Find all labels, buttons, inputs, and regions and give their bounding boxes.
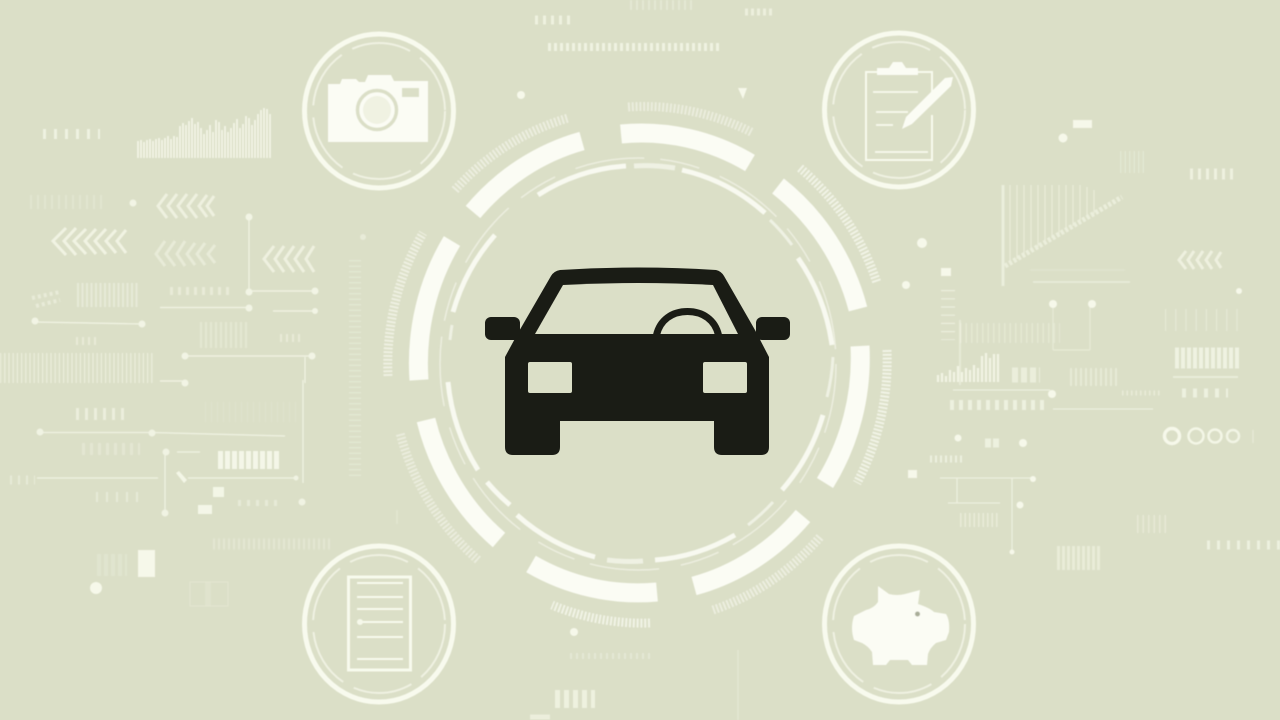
icon: document in circle xyxy=(304,546,454,702)
faint scatter circle xyxy=(1120,151,1147,173)
right headlight xyxy=(703,362,747,393)
right mirror xyxy=(756,317,790,340)
left headlight xyxy=(528,362,572,393)
document xyxy=(348,577,410,670)
camera body xyxy=(328,75,428,142)
bar chart: rising bars xyxy=(138,108,270,158)
connector lines with nodes xyxy=(32,200,318,386)
wave bars strip xyxy=(0,353,155,383)
clipboard xyxy=(866,62,932,160)
circle frame xyxy=(824,546,974,702)
icon: camera in circle xyxy=(304,34,454,188)
faint tick groups xyxy=(10,412,330,606)
thick arc segments xyxy=(418,133,860,593)
small blocks and solid node xyxy=(90,471,224,594)
windshield xyxy=(535,283,738,334)
faint wave chart xyxy=(960,323,1060,343)
circle frame xyxy=(304,34,454,188)
top tick strips xyxy=(517,5,775,99)
top and bottom data strips xyxy=(355,5,775,720)
faint tick rows xyxy=(30,202,302,341)
faint bars top right xyxy=(1165,309,1240,331)
bottom tick strips xyxy=(530,628,738,720)
left data panel: lower xyxy=(10,380,330,606)
triangular trend chart xyxy=(1003,185,1130,286)
circle frame xyxy=(304,546,454,702)
ladder and vertical lines xyxy=(948,290,1090,385)
right data panel xyxy=(902,120,1280,558)
icon: small chevron row xyxy=(43,129,100,139)
ring row xyxy=(1164,428,1253,444)
car body xyxy=(505,268,769,455)
inner thin arc segments xyxy=(448,166,833,561)
pen xyxy=(902,77,953,129)
ring dial around car xyxy=(388,106,887,623)
connector lines with nodes xyxy=(36,380,306,516)
icon: chevrons D xyxy=(264,246,314,272)
icon: chevrons A xyxy=(158,194,214,218)
dots and blocks xyxy=(902,120,1242,554)
left mirror xyxy=(485,317,520,340)
icon: chevrons B xyxy=(53,228,126,255)
tick arcs xyxy=(388,106,887,623)
steering wheel xyxy=(656,312,718,335)
faint left ladder xyxy=(355,234,398,517)
bar block xyxy=(218,451,281,469)
icon: small chevrons xyxy=(1179,251,1221,269)
bar chart xyxy=(938,353,998,382)
tick row xyxy=(1190,168,1233,180)
outer hairline ring xyxy=(440,158,836,570)
left data panel: upper xyxy=(0,108,318,386)
icon: piggy bank in circle xyxy=(824,546,974,702)
bar block xyxy=(1175,348,1240,368)
icon: car front view xyxy=(485,268,790,455)
tick clusters xyxy=(930,375,1280,558)
icon: chevrons C xyxy=(156,241,215,266)
piggy bank xyxy=(852,586,949,665)
circle frame xyxy=(824,33,974,187)
small chevron row xyxy=(76,408,127,420)
icon: clipboard in circle xyxy=(824,33,974,187)
